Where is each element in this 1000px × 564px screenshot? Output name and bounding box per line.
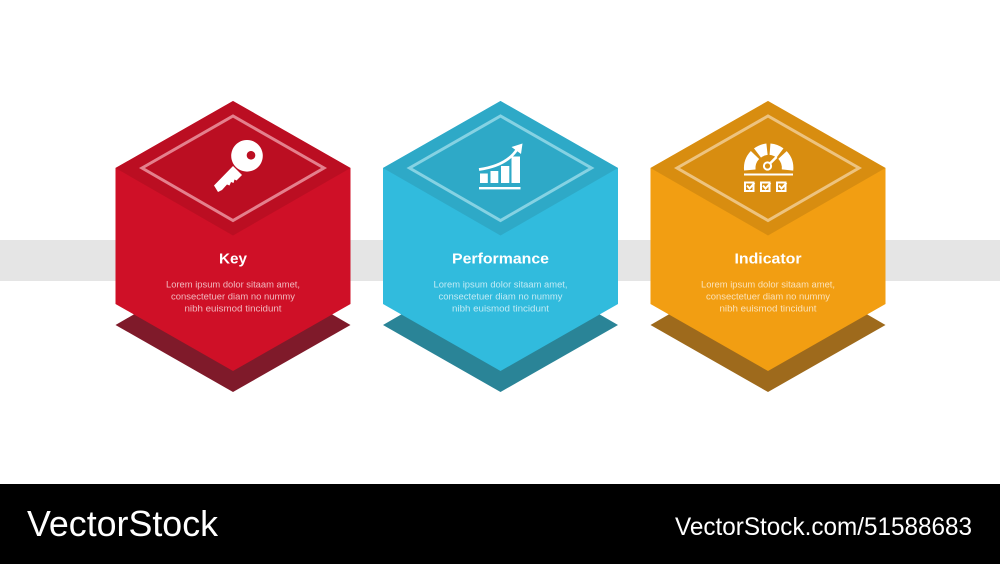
inner diamond outline xyxy=(142,116,324,220)
body text: consectetuer diam no nummy xyxy=(438,292,563,302)
inner diamond outline xyxy=(677,116,859,220)
hexagon shadow xyxy=(116,257,350,392)
body text: nibh euismod tincidunt xyxy=(720,304,817,314)
footer url: VectorStock.com/51588683 xyxy=(675,513,972,541)
body text xyxy=(434,280,568,314)
body text xyxy=(166,280,300,314)
hexagon shadow xyxy=(383,257,618,392)
icon: gauge with checkboxes xyxy=(744,149,793,191)
hexagon shadow xyxy=(650,257,886,392)
body text: Lorem ipsum dolor sitaam amet, xyxy=(166,280,300,290)
footer logo: VectorStock xyxy=(27,503,219,544)
body text: Lorem ipsum dolor sitaam amet, xyxy=(701,280,835,290)
body text: consectetuer diam no nummy xyxy=(171,292,295,302)
inner diamond outline xyxy=(410,116,592,220)
hexagon body xyxy=(383,101,618,371)
body text xyxy=(701,280,835,314)
body text: consectetuer diam no nummy xyxy=(706,292,830,302)
body text: nibh euismod tincidunt xyxy=(184,304,282,314)
top face xyxy=(116,101,350,236)
body text: Lorem ipsum dolor sitaam amet, xyxy=(434,280,568,290)
top face xyxy=(650,101,886,236)
icon: rising bar chart xyxy=(479,144,522,189)
heading: Key: Key xyxy=(219,252,247,268)
hexagon body xyxy=(650,101,886,371)
footer bar xyxy=(0,484,1000,564)
heading: Indicator: Indicator xyxy=(734,252,802,268)
heading: Performance: Performance xyxy=(452,252,549,268)
body text: nibh euismod tincidunt xyxy=(452,304,549,314)
panel: key hexagon xyxy=(116,101,350,392)
hexagon body xyxy=(116,101,350,371)
top face xyxy=(383,101,618,236)
panel: performance hexagon xyxy=(383,101,618,392)
background band xyxy=(0,240,1000,281)
icon: key xyxy=(214,140,263,192)
panel: indicator hexagon xyxy=(650,101,886,392)
